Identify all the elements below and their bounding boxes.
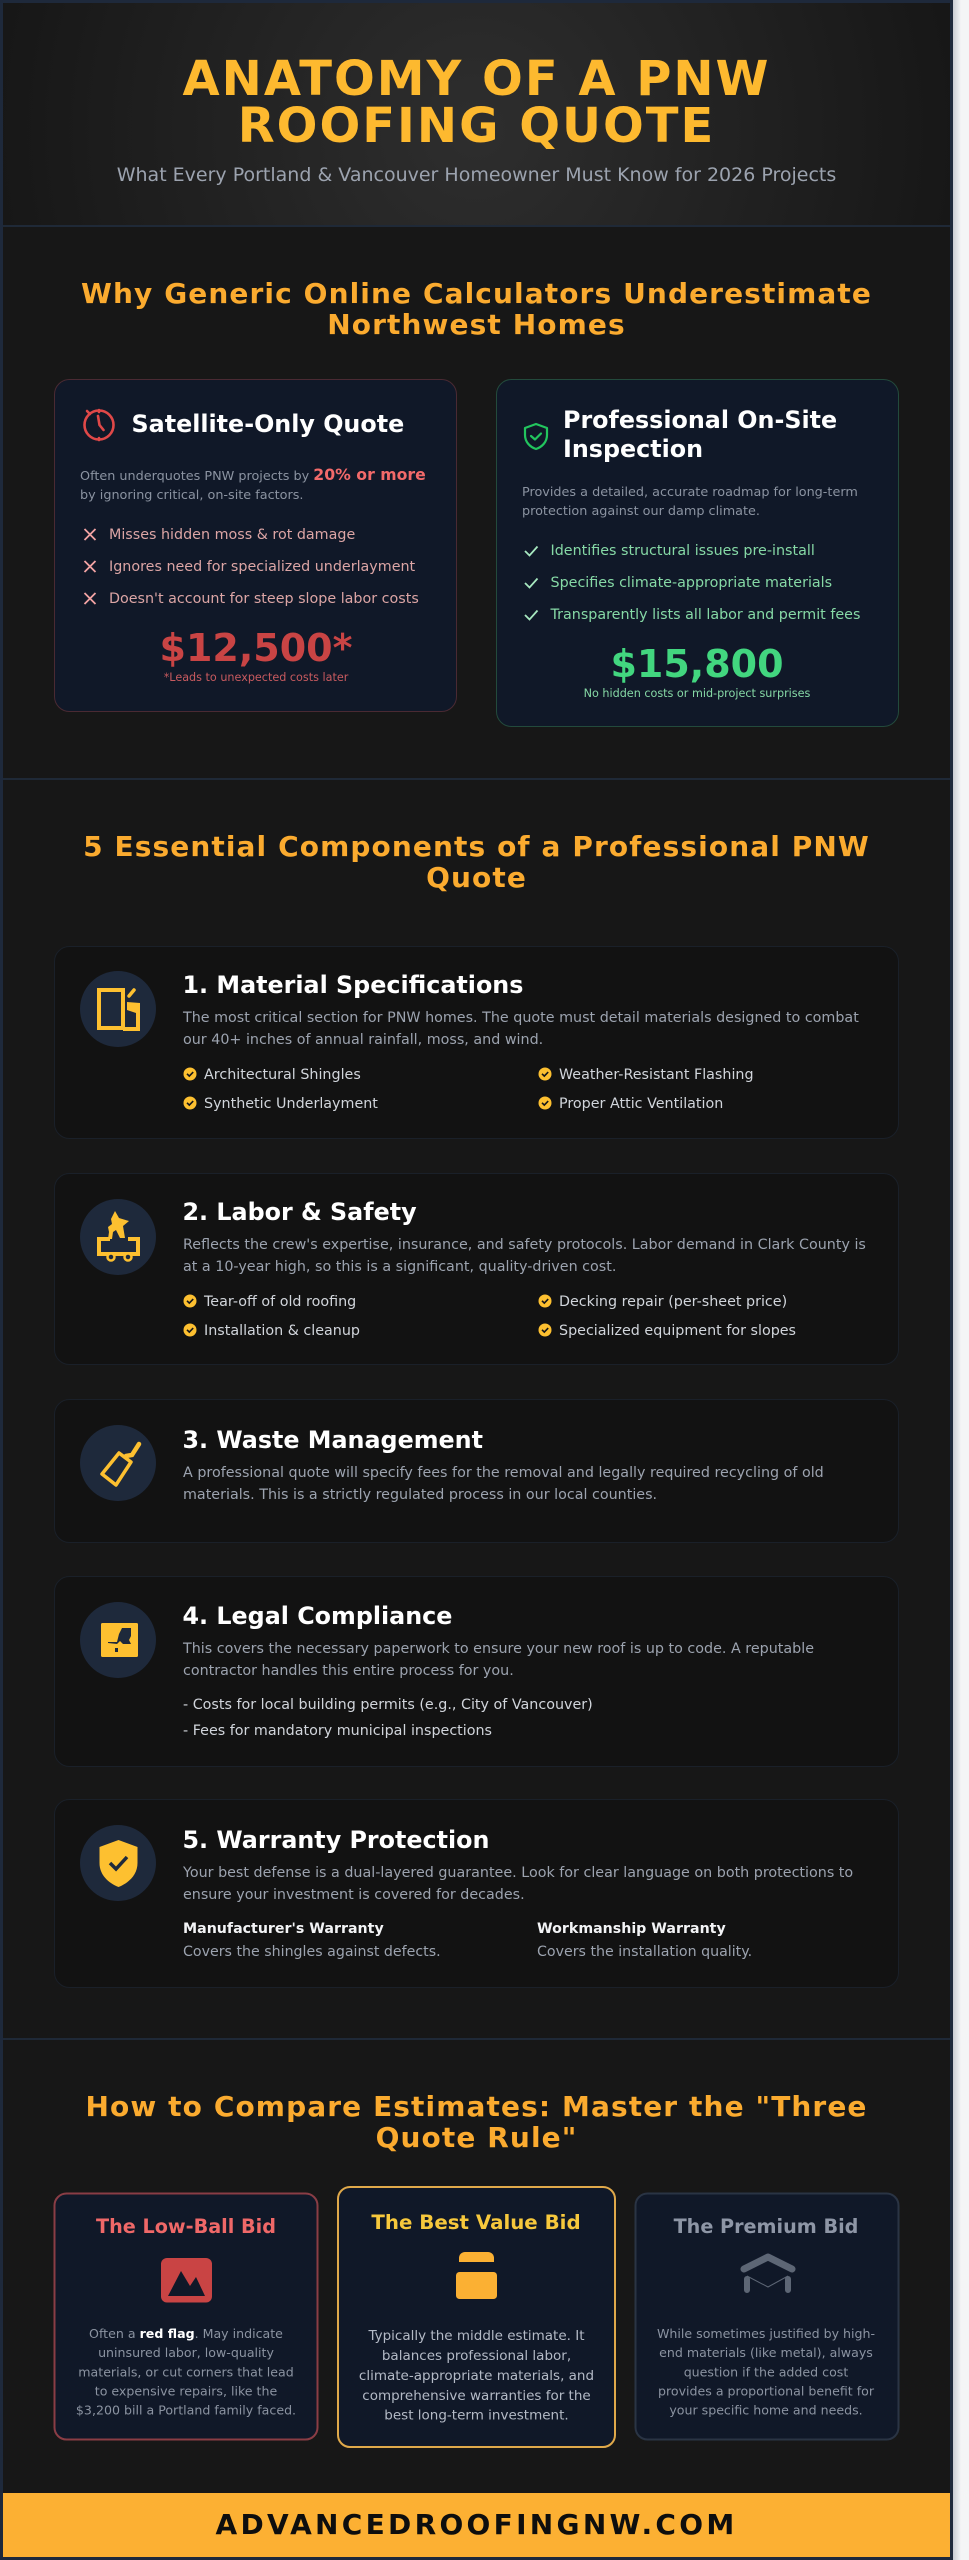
- description: A professional quote will specify fees for the removal and legally required recycling of old: [183, 1465, 824, 1481]
- description: best long-term investment.: [384, 2408, 569, 2424]
- price: $12,500*: [160, 626, 353, 670]
- heading: 4. Legal Compliance: [182, 1602, 452, 1630]
- checklist: Architectural Shingles: [204, 1067, 361, 1083]
- panel: low-ball bid: [54, 2194, 318, 2440]
- title: ROOFING QUOTE: [238, 98, 715, 154]
- list of benefits: Transparently lists all labor and permit fees: [550, 607, 860, 623]
- warranty types: Covers the installation quality.: [537, 1944, 752, 1960]
- icon: shield check: [525, 424, 547, 449]
- icon: shield: [80, 1825, 156, 1901]
- section heading: three quote rule: [85, 2090, 868, 2154]
- footer banner: [3, 2493, 950, 2557]
- section heading: three quote rule: How to Compare Estimates: Master the "Three: [85, 2090, 868, 2123]
- card title: [563, 406, 837, 463]
- card title: Inspection: [563, 435, 703, 463]
- description: Typically the middle estimate. It: [367, 2328, 585, 2344]
- checklist: [184, 1294, 796, 1339]
- description: our 40+ inches of annual rainfall, moss, and wind.: [183, 1032, 543, 1048]
- description: by ignoring critical, on-site factors.: [80, 488, 303, 503]
- description: [183, 1237, 866, 1275]
- icon: clock: [84, 410, 114, 440]
- description: your specific home and needs.: [669, 2402, 863, 2418]
- description: uninsured labor, low-quality: [98, 2345, 274, 2360]
- section heading: essential components: Quote: [426, 861, 527, 894]
- list of shortfalls: Doesn't account for steep slope labor costs: [109, 591, 419, 607]
- checklist: [184, 1067, 754, 1112]
- description: This covers the necessary paperwork to ensure your new roof is up to code. A reputable: [182, 1641, 814, 1657]
- panel: satellite-only quote: [54, 380, 456, 712]
- description: [182, 1010, 859, 1048]
- list of shortfalls: [84, 527, 419, 607]
- description: at a 10-year high, so this is a significant, quality-driven cost.: [183, 1259, 616, 1275]
- heading: The Premium Bid: [674, 2215, 858, 2238]
- description: [182, 1865, 853, 1903]
- warranty types: [183, 1921, 752, 1960]
- panel: premium bid: [636, 2194, 898, 2440]
- panel: labor and safety: [54, 1174, 898, 1364]
- description: [80, 465, 426, 503]
- list of benefits: Specifies climate-appropriate materials: [550, 575, 832, 591]
- description: [522, 485, 858, 519]
- description: While sometimes justified by high-: [657, 2326, 875, 2341]
- section heading: generic calculators: Northwest Homes: [327, 308, 626, 341]
- price note: No hidden costs or mid-project surprises: [584, 687, 811, 700]
- description: [359, 2328, 594, 2424]
- description: question if the added cost: [684, 2364, 848, 2380]
- card title: Satellite-Only Quote: [132, 410, 404, 438]
- list of benefits: Identifies structural issues pre-install: [550, 543, 815, 559]
- description: ensure your investment is covered for decades.: [183, 1887, 525, 1903]
- description: [657, 2326, 875, 2418]
- heading: 1. Material Specifications: [182, 971, 523, 999]
- section heading: generic calculators: Why Generic Online Calculators Underestimate: [81, 277, 872, 310]
- description: Often a red flag. May indicate: [89, 2326, 283, 2341]
- fee list: - Costs for local building permits (e.g., City of Vancouver): [183, 1697, 593, 1713]
- panel: material specifications: [54, 946, 898, 1138]
- checklist: Specialized equipment for slopes: [559, 1323, 796, 1339]
- icon: roof cap: [744, 2257, 792, 2290]
- title: ANATOMY OF A PNW: [183, 51, 770, 107]
- warranty types: Workmanship Warranty: [537, 1921, 726, 1937]
- icon: material: [80, 971, 156, 1047]
- checklist: Weather-Resistant Flashing: [559, 1067, 754, 1083]
- panel: best value bid: [338, 2187, 615, 2447]
- description: end materials (like metal), always: [659, 2345, 873, 2360]
- description: Your best defense is a dual-layered guarantee. Look for clear language on both protections to: [182, 1865, 853, 1881]
- heading: The Best Value Bid: [371, 2211, 581, 2234]
- section heading: three quote rule: Quote Rule": [376, 2121, 577, 2154]
- description: Provides a detailed, accurate roadmap for long-term: [522, 485, 858, 500]
- icon: mountains: [161, 2258, 212, 2302]
- fee list: [183, 1697, 593, 1739]
- heading: 2. Labor & Safety: [182, 1198, 417, 1226]
- title: [183, 51, 770, 154]
- heading: 3. Waste Management: [182, 1426, 483, 1454]
- checklist: Decking repair (per-sheet price): [559, 1294, 787, 1310]
- description: [76, 2326, 296, 2418]
- description: to expensive repairs, like the: [95, 2384, 277, 2398]
- checklist: Tear-off of old roofing: [203, 1294, 356, 1310]
- panel: warranty protection: [54, 1800, 898, 1988]
- description: materials, or cut corners that lead: [78, 2364, 294, 2380]
- description: climate-appropriate materials, and: [359, 2368, 594, 2384]
- header banner: [3, 3, 950, 227]
- description: protection against our damp climate.: [522, 504, 760, 519]
- description: Often underquotes PNW projects by 20% or more: [80, 465, 426, 484]
- panel: legal compliance: [54, 1576, 898, 1766]
- section heading: generic calculators: [81, 277, 872, 341]
- description: comprehensive warranties for the: [362, 2388, 591, 2404]
- checklist: Synthetic Underlayment: [204, 1096, 378, 1112]
- list of shortfalls: Misses hidden moss & rot damage: [109, 527, 355, 543]
- subtitle: What Every Portland & Vancouver Homeowner Must Know for 2026 Projects: [117, 164, 836, 186]
- description: provides a proportional benefit for: [658, 2384, 875, 2398]
- warranty types: Covers the shingles against defects.: [183, 1944, 441, 1960]
- heading: The Low-Ball Bid: [96, 2215, 276, 2238]
- checklist: Installation & cleanup: [204, 1323, 360, 1339]
- panel: professional on-site inspection: [496, 380, 898, 726]
- description: contractor handles this entire process for you.: [183, 1663, 514, 1679]
- checklist: Proper Attic Ventilation: [559, 1096, 723, 1112]
- icon: brush: [80, 1425, 156, 1501]
- description: materials. This is a strictly regulated process in our local counties.: [183, 1487, 657, 1503]
- icon: package: [456, 2252, 497, 2299]
- card title: Professional On-Site: [563, 406, 837, 434]
- description: $3,200 bill a Portland family faced.: [76, 2402, 296, 2418]
- description: Reflects the crew's expertise, insurance, and safety protocols. Labor demand in Clark County is: [183, 1237, 866, 1253]
- heading: 5. Warranty Protection: [182, 1826, 489, 1854]
- description: [183, 1465, 824, 1503]
- section heading: essential components: [83, 830, 870, 894]
- list of shortfalls: Ignores need for specialized underlayment: [109, 559, 416, 575]
- list of benefits: [525, 543, 860, 623]
- icon: labor: [80, 1199, 156, 1275]
- panel: waste management: [54, 1400, 898, 1542]
- warranty types: Manufacturer's Warranty: [183, 1921, 384, 1937]
- description: balances professional labor,: [382, 2348, 571, 2364]
- description: The most critical section for PNW homes. The quote must detail materials designed to combat: [182, 1010, 859, 1026]
- website: ADVANCEDROOFINGNW.COM: [215, 2508, 738, 2541]
- section heading: essential components: 5 Essential Components of a Professional PNW: [83, 830, 870, 863]
- fee list: - Fees for mandatory municipal inspections: [183, 1723, 492, 1739]
- icon: document: [80, 1602, 156, 1678]
- price note: *Leads to unexpected costs later: [164, 671, 349, 684]
- description: [182, 1641, 814, 1679]
- price: $15,800: [610, 642, 784, 686]
